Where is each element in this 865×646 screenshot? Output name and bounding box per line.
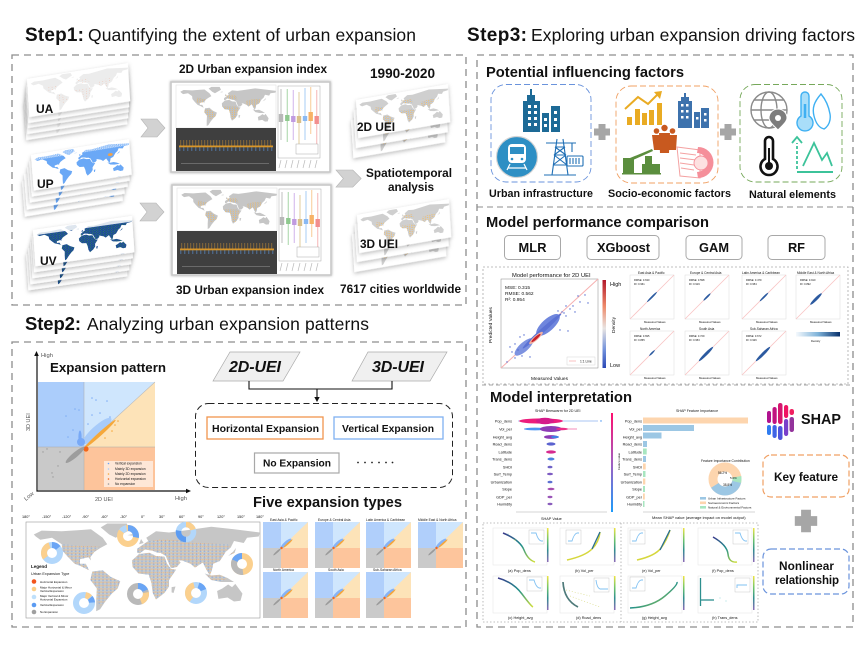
chart: SHAP feature importance bars: Vol_per (629, 428, 643, 432)
card stack: UP (22, 139, 132, 217)
map: urban expansion types: -60° (101, 515, 108, 519)
icon: blue thermometer and drop (797, 92, 830, 131)
label: Urban infrastructure: Urban infrastructure (489, 188, 593, 200)
plot: Vol_per e (628, 528, 684, 573)
button: RF: RF (788, 240, 805, 255)
charts: regional quadrant plots: Latin America & Caribbean (366, 518, 405, 522)
button: RF (768, 236, 825, 260)
chart: SHAP feature importance bars: Pop_dens (625, 420, 642, 424)
chart: expansion pattern quadrant: High (175, 496, 187, 502)
plot: Trans_dens h (698, 576, 754, 620)
box: Horizontal Expansion: Horizontal Expansion (212, 423, 319, 435)
chart: regional model performance: Europe & Central Asia (690, 271, 722, 275)
plot: Height_avg c: (c) Height_avg (508, 616, 533, 620)
legend: expansion type: Horizontal Expansion (40, 580, 68, 584)
card stack: UA (24, 63, 130, 140)
icon: tower buildings (523, 89, 560, 132)
card stack: UP: UP (37, 177, 54, 191)
chart: expansion pattern quadrant: No expansion (115, 482, 135, 486)
icon: crane (544, 139, 583, 175)
chart: measured vs predicted scatter: Model performance for 2D UEI (512, 273, 591, 279)
charts: regional quadrant plots: East Asia & Pacific (270, 518, 298, 522)
chart: regional model performance: R²: 0.954 (746, 282, 757, 286)
arrow: connector merging indexes (249, 381, 392, 402)
panel: performance charts (483, 267, 848, 384)
box: Nonlinear relationship: Nonlinear (779, 559, 834, 573)
chart: regional model performance: Latin America & Caribbean (742, 271, 780, 275)
charts: regional quadrant plots: South Asia (328, 568, 344, 572)
label: Natural elements: Natural elements (749, 189, 836, 201)
label: 2D-UEI (213, 352, 300, 381)
heading: 3D Urban expansion index: 3D Urban expansion index (176, 283, 324, 297)
icon: black thermometer (760, 137, 778, 175)
title: Step3: Step3: (467, 25, 527, 46)
text: 7617 cities worldwide: 7617 cities worldwide (340, 282, 461, 296)
box: No Expansion (254, 453, 339, 473)
chart: SHAP feature importance bars: Socioeconomic Factors (708, 501, 740, 505)
chart: regional model performance (630, 271, 840, 380)
legend: expansion type: Urban Expansion Type (31, 572, 69, 576)
plot: Pop_dens a (493, 528, 548, 573)
chart: SHAP beeswarm (491, 409, 621, 521)
plot: Height_avg c (493, 576, 548, 620)
map: urban expansion types: 60° (179, 515, 185, 519)
chart: expansion pattern quadrant: 3D UEI (26, 413, 32, 431)
arrow: to spatiotemporal analysis (336, 170, 361, 187)
button: MLR (504, 236, 560, 260)
card stack: UV (26, 216, 134, 290)
chart: expansion pattern quadrant: Mainly 2D expansion (115, 472, 146, 476)
chart: SHAP feature importance bars: Latitude (628, 450, 642, 454)
plot: Vol_per b (560, 528, 616, 573)
chart: SHAP beeswarm: Vol_per (499, 428, 513, 432)
chart: SHAP feature importance bars: Mean SHAP value (average impact on model output) (652, 515, 746, 520)
icon: people group (652, 125, 677, 153)
box: Vertical Expansion: Vertical Expansion (342, 424, 434, 435)
heading: Model interpretation: Model interpretation (490, 390, 632, 406)
card stack: 3D UEI: 3D UEI (360, 237, 398, 251)
plot: Vol_per b: (b) Vol_per (575, 569, 594, 573)
chart: SHAP feature importance bars: Urbanization (621, 480, 642, 484)
icon: globe with pin (751, 92, 787, 130)
card stack: 2D UEI: 2D UEI (357, 120, 395, 134)
icon: plus (795, 510, 817, 532)
panel: expansion types dashed box (196, 404, 452, 488)
plot: Road_dens d: (d) Road_dens (576, 616, 601, 620)
chart: regional model performance: R²: 0.926 (746, 338, 757, 342)
legend: expansion type: Horizontal Expansion (40, 598, 68, 602)
chart: regional model performance: Measured Values (810, 320, 832, 324)
chart: SHAP beeswarm: Feature value (617, 452, 621, 470)
chart: regional model performance: RMSE: 0.695 (634, 334, 650, 338)
icon: plus between factors (720, 124, 736, 140)
chart: regional model performance: R²: 0.892 (800, 282, 811, 286)
chart: regional model performance: Measured Values (644, 320, 666, 324)
box: Vertical Expansion (334, 417, 443, 439)
chart: 3D index composite (172, 185, 331, 275)
chart: SHAP feature importance bars: Road_dens (623, 442, 642, 446)
heading: Five expansion types: Five expansion types (253, 495, 402, 511)
chart: regional model performance: RMSE: 0.479 (746, 278, 762, 282)
card stack: 2D UEI (351, 84, 450, 158)
plot: Vol_per e: (e) Vol_per (642, 569, 661, 573)
legend: expansion type: No Expansion (40, 610, 58, 614)
chart: measured vs predicted scatter: Low (610, 363, 620, 369)
group: Urban infrastructure (491, 84, 591, 182)
donut: North America (44, 545, 60, 561)
chart: SHAP beeswarm: SHDI (503, 466, 512, 470)
chart: SHAP beeswarm: SHAP Value (541, 517, 562, 521)
button: GAM (686, 236, 742, 260)
box: Nonlinear relationship: relationship (775, 575, 839, 587)
donut: South America (76, 595, 92, 611)
label: 2D-UEI: 2D-UEI (228, 359, 282, 376)
plot: Pop_dens f: (f) Pop_dens (712, 569, 734, 573)
chart: SHAP feature importance bars: 5.0% (730, 476, 737, 480)
legend: expansion type: Major Horizontal & Minor (40, 586, 72, 590)
chart: measured vs predicted scatter: R²: 0.954 (505, 297, 525, 303)
icon: terrain elevation (792, 137, 833, 172)
map: urban expansion types: 120° (217, 515, 225, 519)
chart: regional model performance: Middle East & North Africa (797, 271, 834, 275)
chart: measured vs predicted scatter: Density (611, 316, 617, 333)
chart: regional model performance: Measured Values (699, 376, 721, 380)
map: urban expansion types: 180° (256, 515, 264, 519)
chart: measured vs predicted scatter: RMSE: 0.562 (505, 291, 534, 297)
chart: regional model performance: RMSE: 0.729 (689, 334, 705, 338)
title: Step1: Quantifying the extent of urban expansion (88, 25, 416, 45)
panel: SHAP dependence plots (483, 523, 758, 622)
charts: regional quadrant plots: Europe & Central Asia (318, 518, 351, 522)
chart: regional model performance: East Asia & Pacific (638, 271, 665, 275)
label: 3D-UEI (352, 352, 447, 381)
plot: Pop_dens a: (a) Pop_dens (508, 569, 531, 573)
chart: measured vs predicted scatter: Measured Values (531, 376, 569, 382)
chart: expansion pattern quadrant: High (41, 353, 53, 359)
icon: metro train (496, 136, 538, 178)
box: Key feature (763, 455, 849, 497)
chart: expansion pattern quadrant: Vertical expansion (115, 462, 142, 466)
heading: Model performance comparison: Model performance comparison (486, 215, 709, 231)
button: MLR: MLR (518, 240, 546, 255)
chart: regional model performance: Measured Values (644, 376, 666, 380)
chart: regional model performance: R²: 0.953 (689, 338, 700, 342)
box: Nonlinear relationship (763, 549, 849, 594)
chart: regional model performance: RMSE: 0.630 (634, 278, 650, 282)
chart: regional model performance: RMSE: 0.672 (746, 334, 762, 338)
chart: regional model performance: Measured Values (699, 320, 721, 324)
plot: Trans_dens h: (h) Trans_dens (712, 616, 738, 620)
plot: Height_avg g: (g) Height_avg (642, 616, 667, 620)
legend: expansion type: Vertical Expansion (40, 603, 64, 607)
chart: expansion pattern quadrant: Horizontal expansion (115, 477, 146, 481)
chart: regional model performance: RMSE: 0.598 (689, 278, 705, 282)
map: urban expansion types: -120° (62, 515, 72, 519)
chart: regional model performance: R²: 0.865 (634, 338, 645, 342)
card stack: UA: UA (36, 102, 54, 116)
group: Natural elements (740, 84, 842, 182)
chart: SHAP feature importance bars: Height_avg (623, 436, 642, 440)
legend: expansion type (31, 564, 72, 614)
chart: regional model performance: South Asia (699, 327, 714, 331)
map: urban expansion types (22, 515, 264, 618)
icon: plus between factors (594, 124, 610, 140)
chart: SHAP feature importance bars: Urban Infrastructure Factors (708, 496, 746, 500)
map: urban expansion types: -150° (42, 515, 52, 519)
logo: SHAP: SHAP (801, 412, 841, 428)
box: Horizontal Expansion (207, 417, 323, 439)
box: Key feature: Key feature (774, 470, 838, 484)
chart: SHAP beeswarm: Pop_dens (495, 420, 512, 424)
chart: SHAP feature importance bars: Trans_dens (622, 458, 642, 462)
charts: regional quadrant plots (263, 518, 463, 618)
chart: SHAP beeswarm: Height_avg (493, 436, 512, 440)
legend: expansion type: Major Vertical & Minor (40, 594, 68, 598)
chart: SHAP feature importance bars: SHAP Feature Importance (676, 409, 718, 413)
card stack: UV: UV (40, 254, 57, 268)
panel: Step1 quantifying (12, 55, 466, 305)
chart: SHAP feature importance bars: 56.2% (718, 471, 727, 475)
chart: 2D index composite (171, 82, 330, 172)
chart: regional model performance: R²: 0.919 (689, 282, 700, 286)
panel: Step2 patterns (12, 342, 466, 627)
chart: regional model performance: Density (811, 339, 821, 343)
map: urban expansion types: 30° (159, 515, 165, 519)
card stack: 3D UEI (352, 199, 451, 272)
icon: document and gear (677, 147, 714, 178)
icon: growth chart (625, 91, 662, 125)
chart: SHAP beeswarm: Latitude (498, 450, 512, 454)
chart: SHAP beeswarm: SHAP Beeswarm for 2D UEI (535, 409, 580, 413)
chart: SHAP feature importance bars: 38.8% (723, 483, 732, 487)
plot: Height_avg g (628, 576, 684, 620)
chart: SHAP beeswarm: Surf_Temp (494, 472, 512, 476)
chart: SHAP feature importance bars: Slope (632, 488, 642, 492)
charts: regional quadrant plots: Middle East & North Africa (418, 518, 457, 522)
donut: Africa north (130, 586, 146, 602)
legend: expansion type: Vertical Expansion (40, 589, 64, 593)
chart: SHAP feature importance bars: Humidity (627, 502, 642, 506)
text: ellipsis (357, 462, 393, 463)
chart: SHAP beeswarm: Trans_dens (492, 458, 512, 462)
chart: SHAP feature importance bars: Surf_Temp (624, 472, 642, 476)
donut: Central Asia (178, 524, 194, 540)
heading: Expansion pattern: Expansion pattern (50, 360, 166, 375)
chart: SHAP feature importance bars (621, 409, 755, 520)
map: urban expansion types: -90° (82, 515, 89, 519)
chart: SHAP feature importance bars: GDP_per (626, 496, 643, 500)
logo: SHAP (767, 403, 841, 440)
map: urban expansion types: 150° (237, 515, 245, 519)
group: Socio-economic factors (616, 86, 718, 183)
map: urban expansion types: 0° (141, 515, 145, 519)
title: Step1: Step1: (25, 25, 84, 46)
chart: measured vs predicted scatter: High (610, 282, 621, 288)
icon: buildings (678, 93, 709, 128)
chart: SHAP beeswarm: Urbanization (491, 480, 512, 484)
chart: SHAP beeswarm: Humidity (497, 502, 512, 506)
chart: SHAP beeswarm: Road_dens (493, 442, 512, 446)
chart: regional model performance: RMSE: 0.910 (800, 278, 816, 282)
donut: Europe (120, 528, 136, 544)
plot: Road_dens d (560, 576, 616, 620)
chart: measured vs predicted scatter: MSE: 0.315 (505, 285, 530, 291)
donut: South Asia (188, 585, 204, 601)
chart: expansion pattern quadrant: Low (23, 491, 36, 503)
chart: SHAP feature importance bars: Feature Importance Contribution (701, 459, 750, 463)
chart: expansion pattern quadrant: Mainly 3D expansion (115, 467, 146, 471)
button: XGboost: XGboost (597, 240, 651, 255)
chart: regional model performance: Measured Values (756, 376, 778, 380)
charts: regional quadrant plots: North America (273, 568, 294, 572)
arrow: UV to 3D index (140, 203, 164, 221)
chart: measured vs predicted scatter: 1:1 Line (580, 360, 592, 364)
chart: SHAP feature importance bars: Natural & Environmental Factors (708, 506, 752, 510)
chart: regional model performance: Measured Values (756, 320, 778, 324)
chart: measured vs predicted scatter: Predicted Values (488, 306, 494, 343)
map: urban expansion types: 90° (198, 515, 204, 519)
button: GAM: GAM (699, 240, 729, 255)
chart: SHAP feature importance bars: SHDI (633, 466, 642, 470)
box: No Expansion: No Expansion (263, 458, 331, 470)
chart: measured vs predicted scatter (488, 273, 621, 382)
label: Socio-economic factors: Socio-economic factors (608, 188, 731, 200)
heading: Potential influencing factors: Potential influencing factors (486, 65, 684, 81)
chart: regional model performance: Sub-Saharan Africa (750, 327, 778, 331)
legend: expansion type: Legend (31, 564, 47, 569)
map: urban expansion types: -30° (120, 515, 127, 519)
chart: SHAP beeswarm: GDP_per (496, 496, 513, 500)
charts: regional quadrant plots: Sub-Saharan Africa (373, 568, 402, 572)
button: XGboost (587, 236, 659, 260)
chart: expansion pattern quadrant: 2D UEI (95, 497, 113, 503)
map: urban expansion types: 180° (22, 515, 30, 519)
title: Step2: Step2: (25, 313, 81, 334)
heading: 2D Urban expansion index: 2D Urban expansion index (179, 62, 327, 76)
chart: SHAP beeswarm: Slope (502, 488, 512, 492)
label: 3D-UEI: 3D-UEI (372, 359, 425, 376)
chart: expansion pattern quadrant (23, 351, 191, 503)
plot: Pop_dens f (698, 528, 754, 573)
arrow: UA/UP to 2D index (141, 119, 165, 137)
donut: East Asia (234, 556, 250, 572)
text: Spatiotemporal analysis: analysis (388, 180, 434, 194)
text: Spatiotemporal analysis (366, 166, 452, 194)
title: Step2: Analyzing urban expansion patterns (87, 314, 369, 334)
heading: 1990-2020: 1990-2020 (370, 66, 435, 81)
chart: regional model performance: North America (640, 327, 660, 331)
chart: regional model performance: R²: 0.961 (634, 282, 645, 286)
icon: port cargo (622, 149, 661, 174)
text: Spatiotemporal analysis: Spatiotemporal (366, 166, 452, 180)
title: Step3: Exploring urban expansion driving factors (531, 25, 855, 45)
chart: importance donut (713, 467, 737, 491)
panel: Step3 driving factors (477, 55, 853, 627)
